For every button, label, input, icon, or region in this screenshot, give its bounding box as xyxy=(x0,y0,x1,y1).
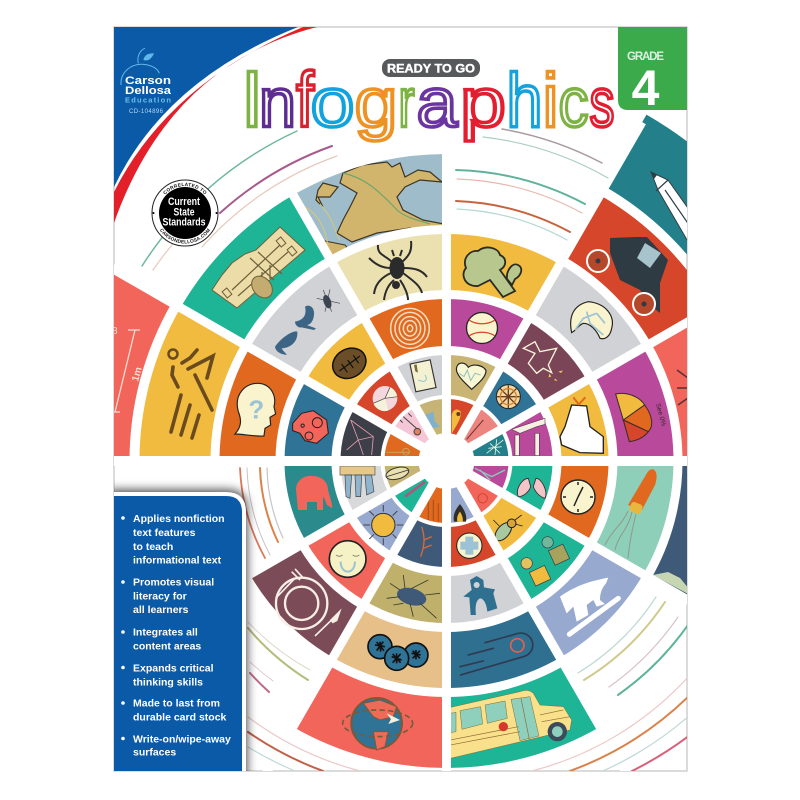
sector: fish and fly on grey xyxy=(250,264,361,376)
sector: fingerprint xyxy=(370,299,442,360)
sector: coral ruler: 1m xyxy=(130,366,145,383)
standards badge xyxy=(152,180,218,246)
bullet: durable card stock: Made to last from xyxy=(133,698,220,710)
sector: brain xyxy=(532,264,643,376)
sector: school bus xyxy=(446,665,600,768)
title: s xyxy=(590,64,614,142)
title: c xyxy=(558,64,588,142)
sector: curtain xyxy=(340,461,389,514)
title: r xyxy=(398,64,414,142)
bullet: nonfiction text features: Applies nonfiction xyxy=(133,513,225,525)
title: n xyxy=(259,64,296,142)
sector: schoolhouse xyxy=(446,561,528,623)
sector: thinking head xyxy=(220,352,296,456)
standards badge: Current xyxy=(168,196,200,208)
title: p xyxy=(460,64,506,142)
sector: heart xyxy=(451,355,496,402)
sector: squid xyxy=(596,466,674,570)
sector: polar bear xyxy=(532,546,643,658)
sector: ocean map xyxy=(297,154,442,254)
standards badge: CARSONDELLOSA.COM xyxy=(160,228,210,244)
icon: apple swirl xyxy=(121,48,159,85)
sector: inner orange tool xyxy=(384,434,420,456)
sector: elephant xyxy=(284,461,347,542)
series label pill xyxy=(382,59,480,77)
bullet: critical thinking: thinking skills xyxy=(133,676,203,688)
sector: globe xyxy=(293,665,446,768)
bullet: critical thinking xyxy=(121,662,214,688)
sector: columns xyxy=(506,412,552,456)
sector: gauge xyxy=(596,352,674,456)
sector: inner orange wood xyxy=(416,485,446,523)
sector: inner teal zipper xyxy=(393,475,432,515)
sector: football xyxy=(308,323,386,400)
bullet: durable card stock: durable card stock xyxy=(133,711,227,723)
sector: antique car xyxy=(568,197,687,340)
title: o xyxy=(310,64,354,142)
grade tab: GRADE xyxy=(627,51,664,63)
sector: pie chart xyxy=(357,372,410,424)
bullet: visual literacy xyxy=(121,577,214,616)
sector: coral ruler: 8 xyxy=(112,326,118,337)
title: f xyxy=(296,56,314,144)
sector: coral ruler xyxy=(114,274,170,456)
sector: inner coral rose xyxy=(464,478,498,512)
bullet: content areas: content areas xyxy=(133,641,201,653)
sector: tan star xyxy=(420,399,442,435)
publisher logo xyxy=(121,48,172,115)
sector: pizza xyxy=(483,372,536,424)
sector: constellation xyxy=(340,412,388,456)
sector: clock xyxy=(548,466,608,538)
sector: navy cliff xyxy=(653,466,687,594)
sector: coral with rays xyxy=(653,328,687,456)
bullet: visual literacy: literacy for xyxy=(133,591,187,603)
standards badge: State xyxy=(174,207,194,219)
sector: navy branch xyxy=(394,518,446,567)
sector: beetle xyxy=(484,498,536,550)
sector: circuit chips xyxy=(508,522,584,599)
title: h xyxy=(506,58,542,144)
sector: inner red xyxy=(451,399,474,435)
sector: dinner plate xyxy=(250,546,361,658)
bullet: nonfiction text features: informational text xyxy=(133,555,222,567)
title: g xyxy=(354,64,398,142)
sector: notepad xyxy=(398,355,442,402)
series label pill: READY TO GO xyxy=(387,64,475,76)
bullet: nonfiction text features: text features xyxy=(133,527,196,539)
grade tab xyxy=(618,27,687,116)
sector: thinking head: ? xyxy=(248,394,264,424)
bullet: nonfiction text features xyxy=(121,513,225,567)
sector: firefly xyxy=(508,323,584,400)
title: i xyxy=(542,58,558,144)
sector: yellow with bag xyxy=(548,384,608,456)
sector: sun xyxy=(355,494,414,553)
publisher logo: CD-104896 xyxy=(129,109,164,115)
corner banner: blue with red stripe xyxy=(114,27,317,223)
sector: blueberries xyxy=(333,609,446,688)
sector gaps xyxy=(100,100,785,790)
sector: comet xyxy=(446,609,560,688)
title: I xyxy=(241,54,263,144)
decorative arcs xyxy=(142,129,690,771)
sector: asteroid xyxy=(284,384,345,456)
bullet: critical thinking: Expands critical xyxy=(133,662,214,674)
publisher logo: Dellosa xyxy=(125,85,172,97)
sector: lungs xyxy=(506,466,552,510)
sector: baseball xyxy=(451,299,524,360)
sector: golfer on yellow xyxy=(140,308,242,461)
bullet: content areas: Integrates all xyxy=(133,627,198,639)
standards badge: CORRELATED TO xyxy=(163,182,206,194)
bullet: write-on surfaces: Write-on/wipe-away xyxy=(133,733,231,745)
sector: gauge: See 0% xyxy=(654,403,667,427)
standards badge: Standards xyxy=(162,217,206,229)
publisher logo: Carson xyxy=(125,75,171,87)
bullet: content areas xyxy=(121,627,201,653)
sector: historic building xyxy=(181,195,328,343)
sector: inner periwinkle flame xyxy=(451,487,474,523)
title: a xyxy=(416,64,458,142)
bullet: write-on surfaces: surfaces xyxy=(133,746,176,758)
sector: smiley xyxy=(306,518,389,601)
bullet: nonfiction text features: to teach xyxy=(133,541,173,553)
bullet: visual literacy: all learners xyxy=(133,604,189,616)
sector: thermometer xyxy=(395,410,429,444)
sector: inner teal snowflake xyxy=(472,434,508,456)
page cover background xyxy=(114,27,687,771)
publisher logo: Education xyxy=(125,96,171,104)
sector: inner salmon xyxy=(464,410,498,444)
sector: red cross badge xyxy=(446,518,500,567)
bullet: write-on surfaces xyxy=(121,733,231,758)
bullet: durable card stock xyxy=(121,698,227,723)
blue feature panel xyxy=(110,494,244,780)
sector: cockroach xyxy=(366,561,446,623)
grade tab: 4 xyxy=(632,60,660,116)
sector: pencil on teal xyxy=(608,114,687,254)
sector: inner magenta wave xyxy=(472,466,508,488)
sector: broccoli xyxy=(446,234,560,313)
sector: spider on cream xyxy=(333,234,446,313)
bullet: visual literacy: Promotes visual xyxy=(133,577,214,589)
sector: inner tan leaf xyxy=(384,461,422,492)
